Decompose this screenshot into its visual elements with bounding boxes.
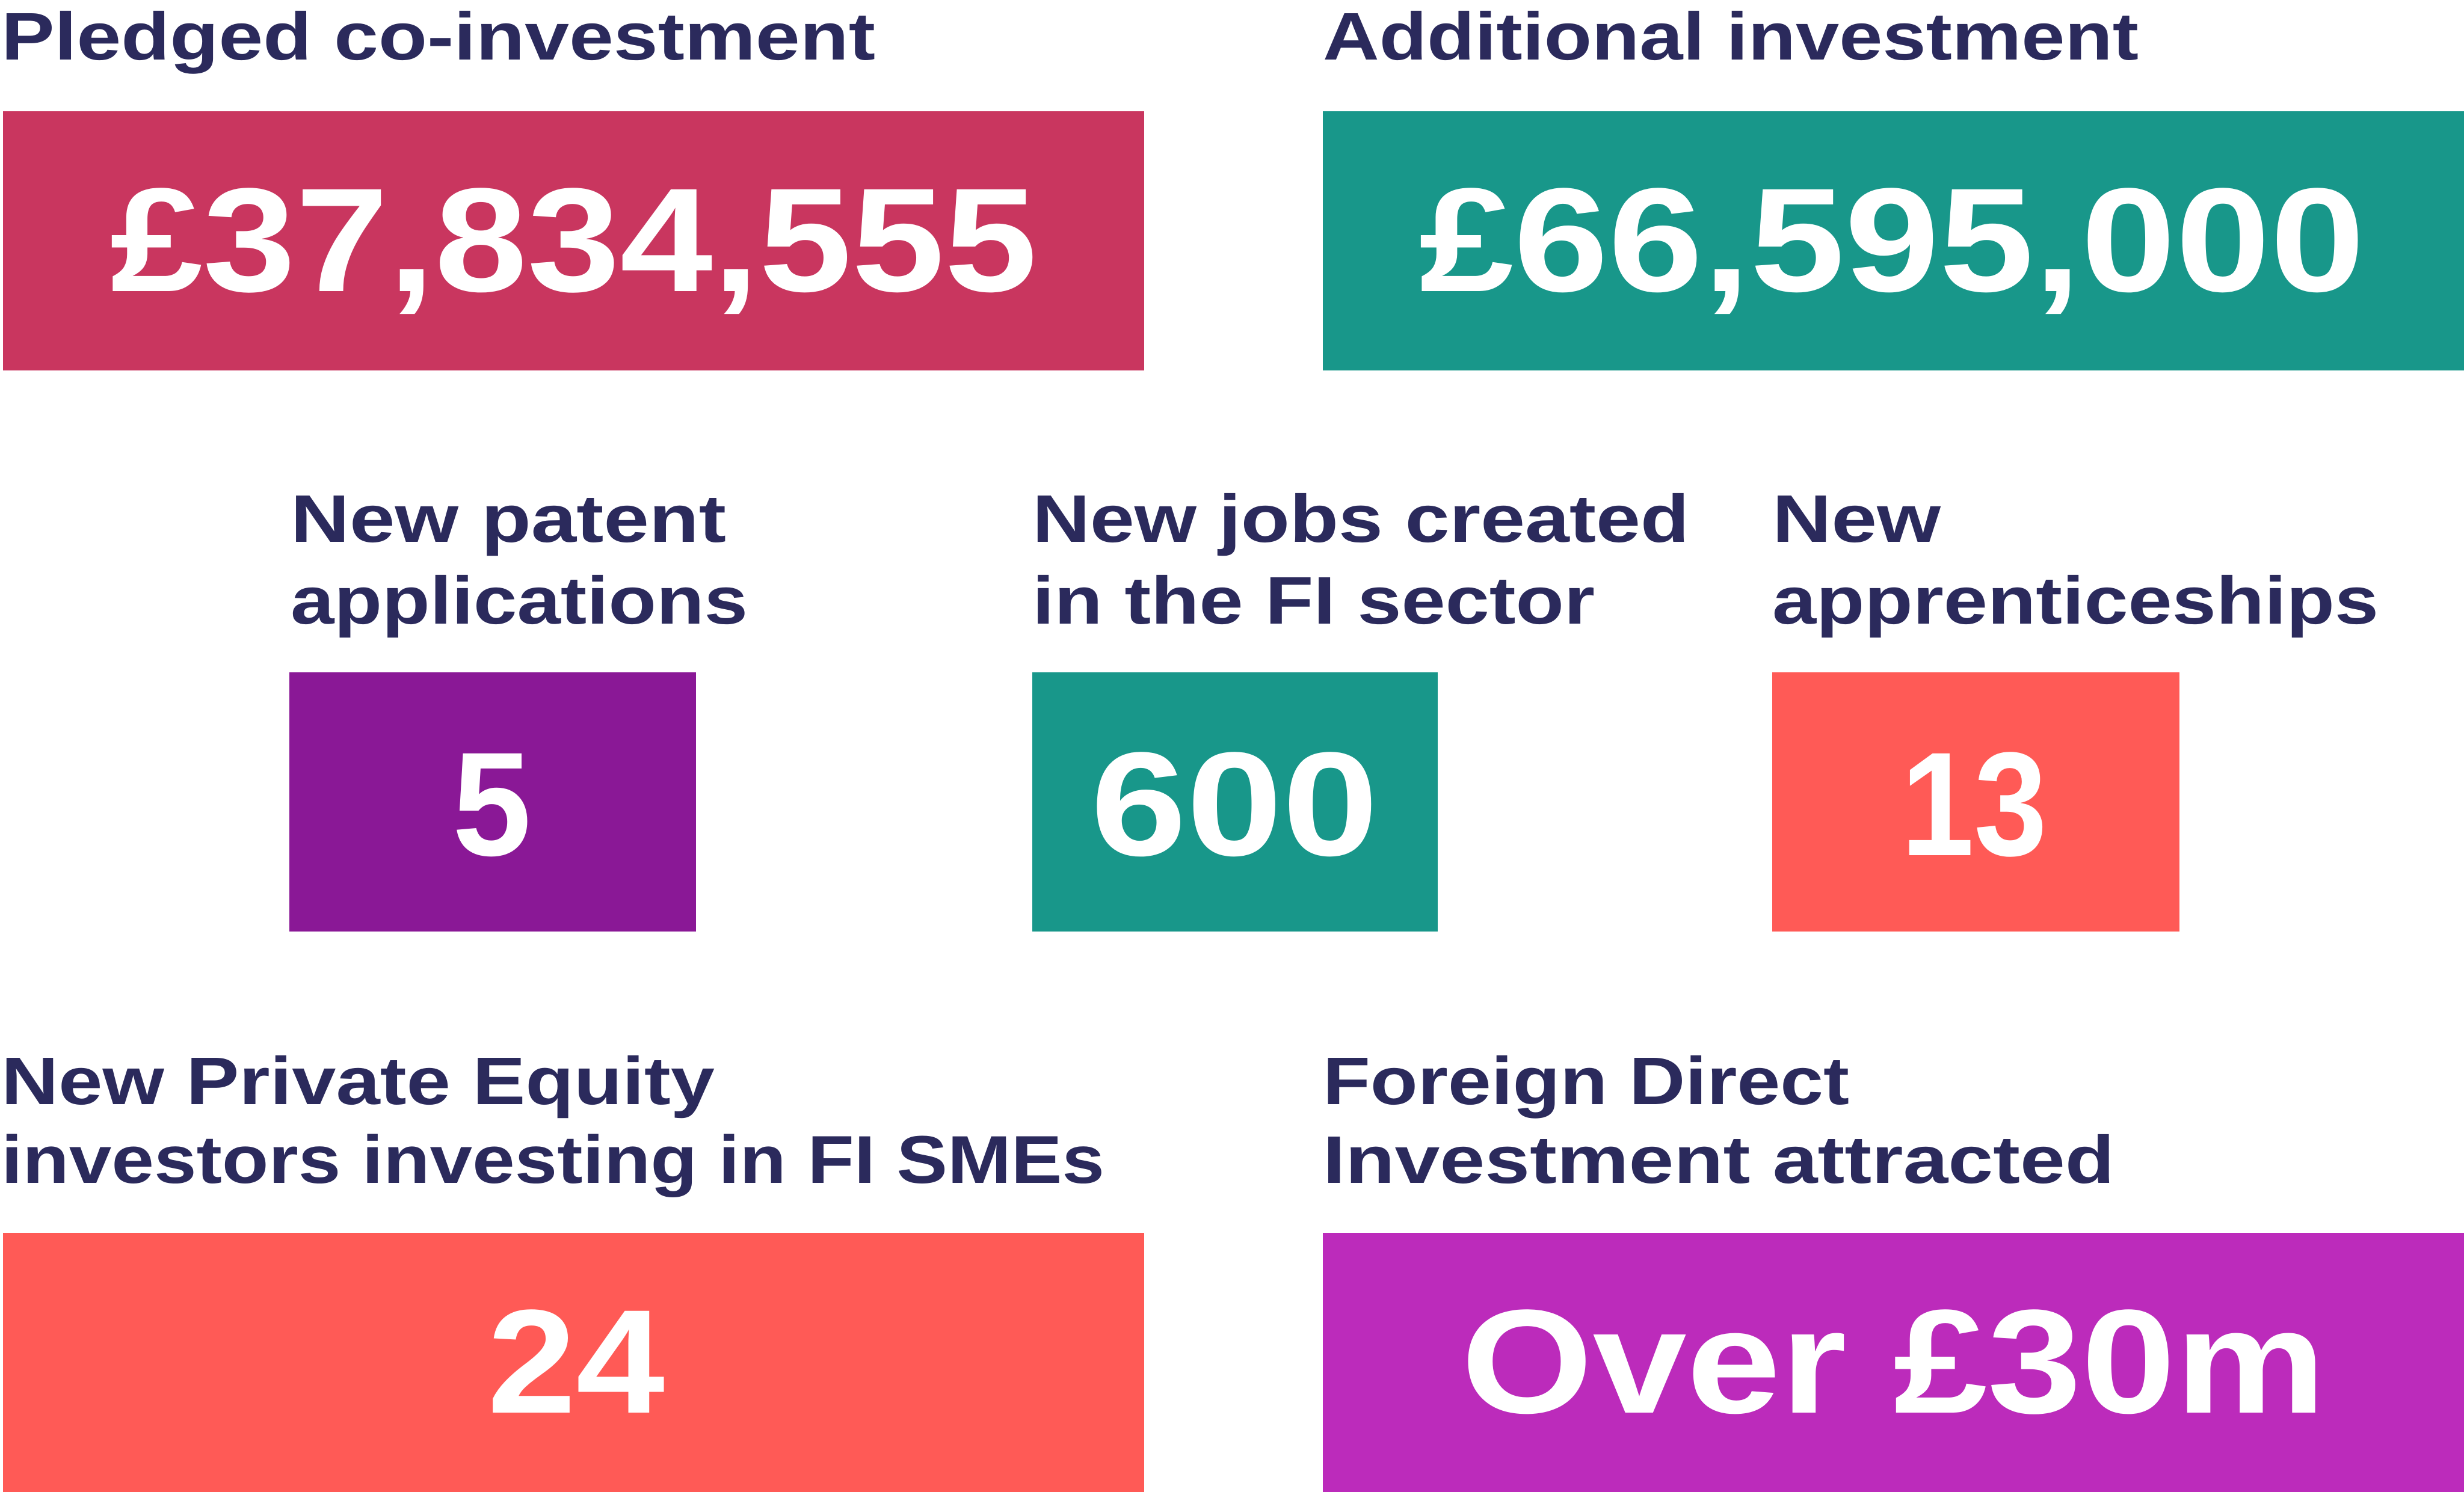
heading: private equity: New Private Equity (1, 1043, 715, 1119)
heading: apprenticeships: apprenticeships (1772, 563, 2379, 638)
number: additional: £66,595,000 (1419, 158, 2365, 323)
number: apprenticeships: 13 (1901, 722, 2047, 887)
number: jobs: 600 (1091, 722, 1378, 887)
panel: pledged co-investment (1, 0, 1144, 370)
value box: additional (1323, 111, 2464, 370)
heading: patents: applications (291, 563, 748, 638)
panel: patents (289, 481, 748, 932)
number: FDI: Over £30m (1461, 1279, 2326, 1444)
number: pledged: £37,834,555 (110, 158, 1037, 323)
value box: apprenticeships (1772, 672, 2179, 932)
heading: apprenticeships: New (1772, 481, 1941, 556)
number: patents: 5 (452, 722, 531, 887)
value box: pledged (3, 111, 1144, 370)
panel: additional investment (1323, 0, 2464, 370)
value box: private equity (3, 1233, 1144, 1492)
heading: jobs: in the FI sector (1032, 563, 1595, 638)
heading: patents: New patent (291, 481, 726, 556)
heading: additional investment: Additional investment (1323, 0, 2139, 74)
panel: private equity (1, 1043, 1144, 1492)
value box: jobs (1032, 672, 1438, 932)
heading: jobs: New jobs created (1032, 481, 1689, 556)
heading: FDI: Investment attracted (1323, 1122, 2114, 1197)
heading: FDI: Foreign Direct (1323, 1043, 1849, 1119)
heading: pledged co-investment: Pledged co-investment (1, 0, 875, 74)
heading: private equity: investors investing in FI SMEs (1, 1122, 1104, 1197)
panel: FDI (1323, 1043, 2464, 1492)
number: private equity: 24 (487, 1279, 665, 1444)
value box: FDI (1323, 1233, 2464, 1492)
panel: jobs (1032, 481, 1689, 932)
panel: apprenticeships (1772, 481, 2379, 932)
value box: patents (289, 672, 696, 932)
